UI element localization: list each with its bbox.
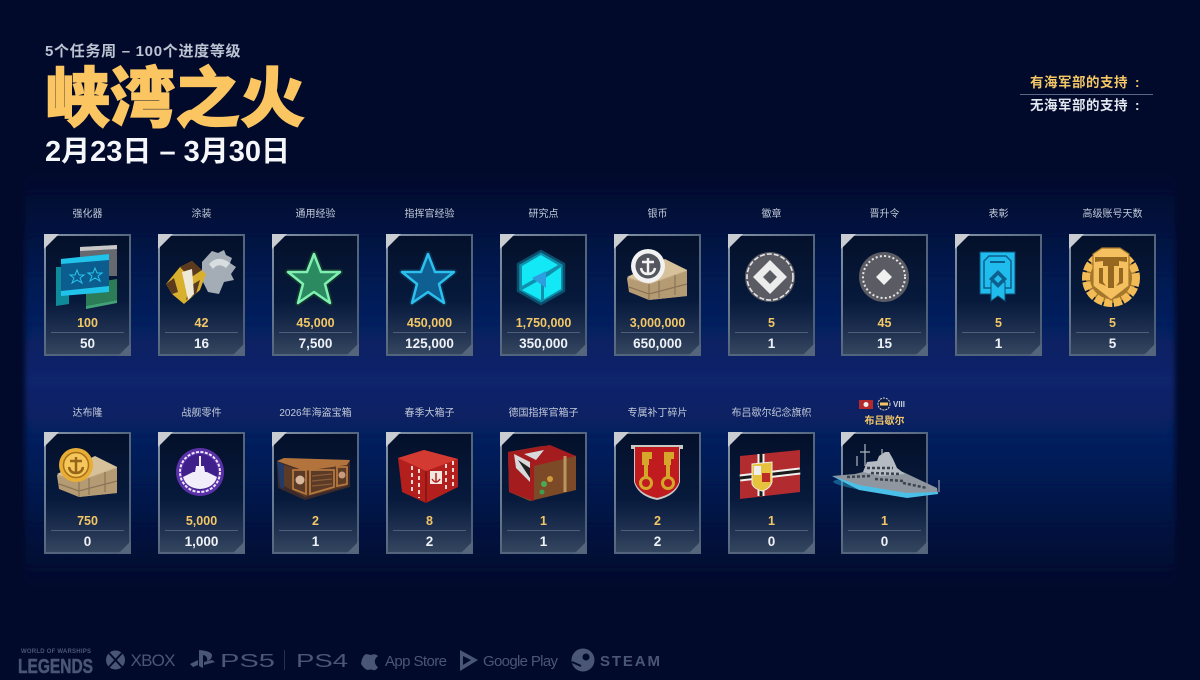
card: 研究点 [500, 207, 587, 356]
card: 布吕歇尔纪念旗帜: 0 [768, 534, 775, 549]
card: 表彰: 1 [995, 336, 1003, 351]
legend: : [1135, 98, 1140, 113]
card: 春季大箱子: 8 [426, 514, 433, 528]
legend: 有海军部的支持 [1030, 75, 1128, 90]
icon: premium gold laurel [1086, 248, 1136, 303]
icon: research hexagon [518, 251, 564, 304]
card: 晋升令: 15 [877, 336, 892, 351]
card: 银币: 3,000,000 [630, 316, 685, 330]
card: 指挥官经验: 指挥官经验 [404, 207, 454, 220]
logo: PlayStation: PS5 [220, 651, 275, 671]
logo: World of Warships Legends [18, 649, 93, 678]
card: 徽章 [728, 207, 815, 356]
logo: Google Play [460, 650, 558, 671]
icon: German commander crate [508, 445, 576, 501]
card: 徽章: 5 [768, 316, 775, 330]
card: 布吕歇尔 ship: 0 [881, 534, 888, 549]
icon: commendation certificate [980, 252, 1015, 301]
ship tier marks: VIII [893, 400, 905, 409]
card: 达布隆: 750 [77, 514, 98, 528]
card: 达布隆: 达布隆 [72, 406, 102, 419]
card: 表彰 [955, 207, 1042, 356]
logo: Google Play: Google Play [483, 653, 558, 670]
card: 涂装: 42 [195, 316, 208, 330]
title: 峡湾之火 [45, 62, 305, 135]
card: 晋升令: 45 [878, 316, 891, 330]
icon: insignia [745, 252, 795, 302]
card: 强化器: 50 [80, 336, 95, 351]
logo: App Store: App Store [385, 653, 447, 670]
card: 德国指挥官箱子: 1 [540, 514, 547, 528]
card: 布吕歇尔纪念旗帜 [728, 406, 815, 554]
logo: Xbox [106, 650, 176, 670]
icon: battleship [832, 444, 939, 498]
card: 专属补丁碎片: 专属补丁碎片 [628, 406, 688, 419]
card: 战舰零件: 战舰零件 [182, 406, 222, 419]
legend [1020, 74, 1153, 113]
card: 达布隆 [44, 406, 131, 554]
card: 布吕歇尔纪念旗帜: 1 [768, 514, 775, 528]
icon: promotion token [859, 252, 909, 302]
card: 通用经验: 7,500 [299, 336, 332, 351]
icon: green star [288, 254, 340, 303]
card: 2026年海盗宝箱: 2026年海盗宝箱 [279, 406, 352, 419]
card: 布吕歇尔 ship [832, 398, 939, 554]
card: 徽章: 徽章 [762, 207, 782, 220]
card: 春季大箱子: 春季大箱子 [404, 406, 454, 419]
card: 晋升令: 晋升令 [870, 207, 900, 220]
card: 晋升令 [841, 207, 928, 356]
icon: blue star [402, 254, 454, 303]
logo: Steam: STEAM [600, 653, 660, 670]
card: 高级账号天数 [1069, 207, 1156, 356]
logo: World of Warships Legends: WORLD OF WARSHIPS [21, 649, 91, 655]
card: 春季大箱子 [386, 406, 473, 554]
icon: ship parts [176, 448, 224, 496]
card: 涂装: 涂装 [192, 207, 212, 220]
icon: red shield patch [631, 445, 683, 500]
card: 布吕歇尔纪念旗帜: 布吕歇尔纪念旗帜 [732, 406, 812, 419]
logo: World of Warships Legends: LEGENDS [18, 656, 93, 678]
card: 布吕歇尔 ship: 1 [881, 514, 888, 528]
icon: boosters [56, 245, 117, 309]
card: 指挥官经验 [386, 207, 473, 356]
card: 春季大箱子: 2 [426, 534, 433, 549]
logo: Xbox: XBOX [130, 651, 176, 670]
card: 强化器: 强化器 [72, 207, 102, 220]
logo: PlayStation [190, 650, 348, 671]
card: 银币 [614, 207, 701, 356]
card: 研究点: 研究点 [528, 207, 558, 220]
legend: 无海军部的支持 [1030, 98, 1128, 113]
card: 达布隆: 0 [84, 534, 91, 549]
card: 战舰零件: 5,000 [186, 514, 217, 528]
icon: crate with silver coin [627, 249, 687, 300]
card: 德国指挥官箱子: 德国指挥官箱子 [508, 406, 578, 419]
card: 表彰: 5 [995, 316, 1002, 330]
card: 布吕歇尔 ship: 布吕歇尔 [864, 414, 904, 427]
card: 表彰: 表彰 [988, 207, 1008, 220]
card: 通用经验: 通用经验 [296, 207, 336, 220]
card: 研究点: 350,000 [519, 336, 568, 351]
card: 高级账号天数: 5 [1109, 316, 1116, 330]
logo: PlayStation: PS4 [296, 651, 348, 671]
card: 强化器 [44, 207, 131, 356]
icon: red crate [398, 450, 458, 503]
card: 涂装: 16 [194, 336, 209, 351]
card: 高级账号天数: 高级账号天数 [1082, 207, 1142, 220]
legend: : [1135, 75, 1140, 90]
card: 研究点: 1,750,000 [516, 316, 571, 330]
card: 通用经验 [272, 207, 359, 356]
card: 2026年海盗宝箱: 1 [312, 534, 320, 549]
card: 专属补丁碎片: 2 [654, 534, 661, 549]
card: 银币: 650,000 [633, 336, 682, 351]
card: 2026年海盗宝箱: 2 [312, 514, 319, 528]
card: 高级账号天数: 5 [1109, 336, 1117, 351]
card: 银币: 银币 [648, 207, 668, 220]
card: 战舰零件 [158, 406, 245, 554]
subtitle: 5个任务周 – 100个进度等级 [45, 42, 241, 60]
icon: pirate chest [277, 458, 350, 500]
card: 通用经验: 45,000 [296, 316, 335, 330]
card: 专属补丁碎片: 2 [654, 514, 661, 528]
icon: camouflage [166, 250, 236, 304]
card: 指挥官经验: 125,000 [405, 336, 454, 351]
footer: platform logos [18, 648, 660, 678]
card: 涂装 [158, 207, 245, 356]
card: 战舰零件: 1,000 [185, 534, 218, 549]
date range: 2月23日 – 3月30日 [45, 136, 290, 168]
card: 2026年海盗宝箱 [272, 406, 359, 554]
card: 德国指挥官箱子: 1 [540, 534, 548, 549]
icon: commemorative flag [740, 450, 800, 499]
card: 专属补丁碎片 [614, 406, 701, 554]
card: 指挥官经验: 450,000 [407, 316, 452, 330]
card: 强化器: 100 [77, 316, 98, 330]
ship tier marks [859, 398, 905, 410]
card: 徽章: 1 [768, 336, 776, 351]
background band [25, 170, 1175, 590]
card: 德国指挥官箱子 [500, 406, 587, 554]
icon: crate with gold coin [57, 448, 117, 497]
logo: Steam [572, 648, 660, 672]
